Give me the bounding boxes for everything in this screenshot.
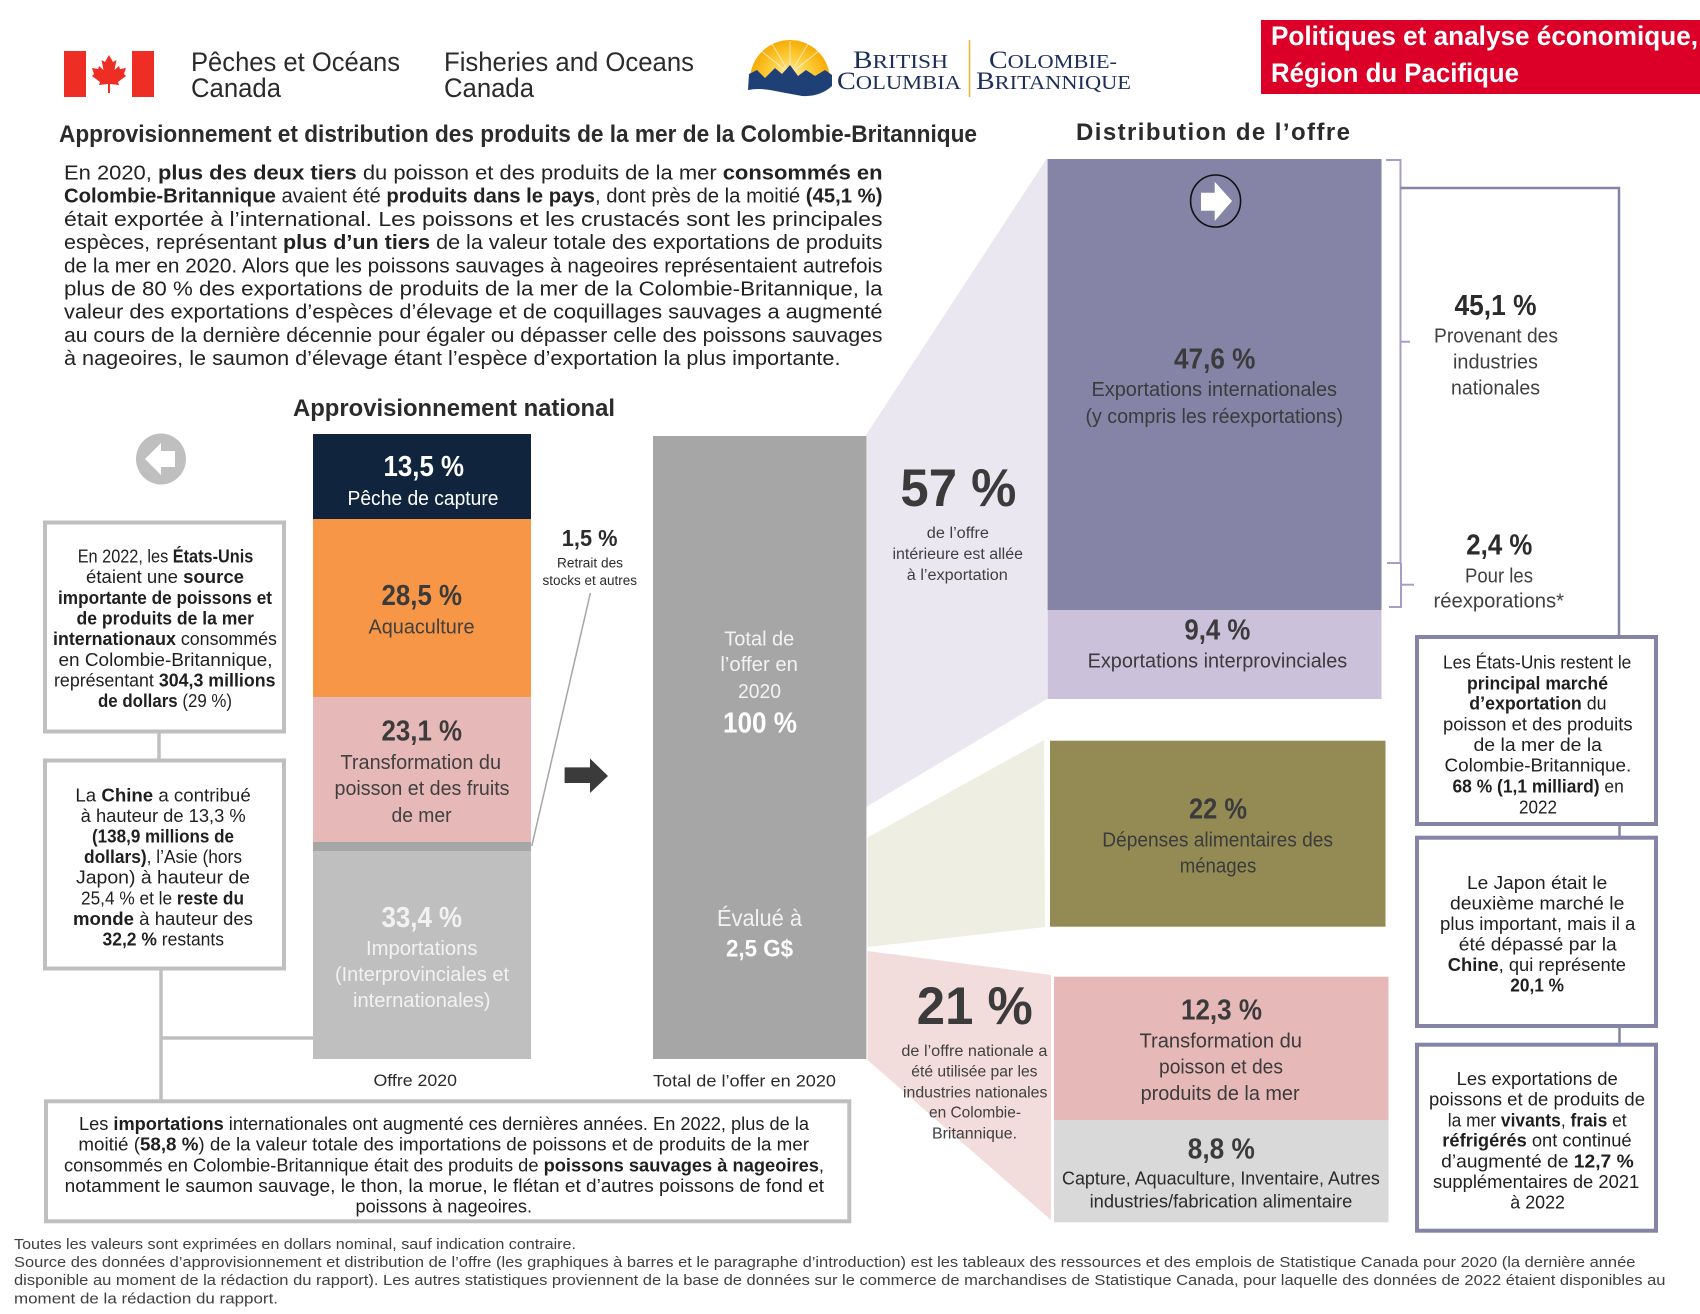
text block: introduction: de la mer en 2020. Alors que les poissons sauvages à nageoires représentaient autrefois [64, 255, 882, 277]
segment: international exports [1048, 159, 1382, 610]
panel: United States export market: de la mer de la [1474, 735, 1603, 755]
stat: 21 % used by industries: industries nationales [903, 1084, 1048, 1101]
panel: United States imports: en Colombie-Britannique, [58, 650, 272, 670]
segment: Transformation [313, 697, 531, 842]
segment: Transformation: de mer [392, 805, 452, 827]
segment: Transformation: 23,1 % [382, 716, 462, 748]
chart: Total de l'offre bar: l’offer en [720, 654, 798, 676]
text block: introduction: espèces, représentant plus d’un tiers de la valeur totale des exportations de produits [64, 232, 882, 254]
text block: footnotes: Toutes les valeurs sont exprimées en dollars nominal, sauf indication contraire. [14, 1236, 576, 1253]
panel: Japan export market [1417, 838, 1656, 1026]
chart: Offre 2020 stacked bar [313, 434, 531, 1090]
segment: interprovincial exports: Exportations interprovinciales [1088, 651, 1347, 673]
stat: 57 % exported: de l’offre [927, 525, 989, 542]
logo: British Columbia [748, 40, 1131, 97]
connector: right purple line [1400, 188, 1620, 1043]
axis label: Total de l'offre: Total de l’offer en 2020 [653, 1072, 836, 1090]
axis label: Offre 2020: Offre 2020 [374, 1071, 457, 1090]
banner: Politiques et analyse économique: Politiques et analyse économique, [1271, 21, 1698, 51]
wordmark: French [191, 47, 400, 103]
text block: introduction: plus de 80 % des exportations de produits de la mer de la Colombie-Britannique, la [64, 278, 883, 300]
segment: processing industries: poisson et des [1159, 1057, 1283, 1079]
panel: United States imports: importante de poissons et [58, 588, 272, 608]
callout: 1,5 % stock withdrawal: Retrait des [557, 555, 623, 570]
panel: United States export market: poisson et des produits [1443, 714, 1633, 734]
panel: China imports: à hauteur de 13,3 % [81, 806, 246, 826]
stat: 21 % used by industries: en Colombie- [929, 1105, 1021, 1122]
segment: other industries: Capture, Aquaculture, Inventaire, Autres [1062, 1168, 1380, 1188]
segment: interprovincial exports: 9,4 % [1184, 614, 1251, 646]
segment: other industries: industries/fabrication alimentaire [1090, 1192, 1352, 1212]
panel: Japan export market: Le Japon était le [1467, 873, 1607, 893]
panel: live, fresh and chilled exports: Les exportations de [1457, 1069, 1618, 1089]
wordmark: English: Fisheries and Oceans [444, 47, 694, 77]
panel: international imports: Les importations internationales ont augmenté ces dernières années. En 2022, plus de la [79, 1114, 810, 1134]
wordmark: English [444, 47, 694, 103]
segment: Transformation: poisson et des fruits [334, 778, 510, 800]
stat: 2,4 % re-exports: 2,4 % [1466, 529, 1532, 561]
panel: Japan export market: deuxième marché le [1450, 893, 1624, 913]
panel: live, fresh and chilled exports: d’augmenté de 12,7 % [1441, 1151, 1634, 1171]
text block: footnotes: moment de la rédaction du rapport. [14, 1290, 278, 1307]
heading: Approvisionnement national: Approvisionnement national [293, 395, 615, 422]
icon: BC sun and mountains [748, 40, 832, 96]
panel: United States imports: En 2022, les États-Unis [78, 546, 253, 566]
callout: 1,5 % stock withdrawal [532, 525, 637, 846]
wordmark: British Columbia: COLUMBIA [837, 68, 962, 95]
panel: international imports: notamment le saumon sauvage, le thon, la morue, le flétan et d’autres poissons de fond et [65, 1176, 824, 1196]
connector: left grey lines [159, 733, 313, 1100]
panel: live, fresh and chilled exports [1417, 1045, 1656, 1231]
funnel: household share [868, 740, 1045, 947]
funnel: industry share [868, 951, 1051, 1220]
chart: Total de l'offre bar: Évalué à [717, 905, 802, 931]
panel: live, fresh and chilled exports: à 2022 [1510, 1193, 1565, 1213]
text block: introduction: valeur des exportations d’espèces d’élevage et de coquillages sauvages a augmenté [64, 302, 882, 324]
panel: United States export market: Colombie-Britannique. [1444, 756, 1631, 776]
segment: Pêche de capture: 13,5 % [384, 451, 464, 483]
icon: left arrow [136, 434, 186, 484]
panel: live, fresh and chilled exports: réfrigérés ont continué [1442, 1131, 1632, 1151]
stat: 57 % exported: à l’exportation [907, 567, 1008, 584]
logo: Government of Canada [64, 47, 694, 103]
panel: live, fresh and chilled exports: supplémentaires de 2021 [1433, 1172, 1639, 1192]
segment: Importations: Importations [366, 938, 478, 960]
text block: introduction [64, 162, 883, 370]
panel: United States imports: représentant 304,3 millions [54, 670, 276, 690]
segment: processing industries: produits de la mer [1141, 1083, 1300, 1105]
stat: 21 % used by industries: Britannique. [932, 1125, 1017, 1142]
wordmark: Colombie-Britannique: BRITANNIQUE [976, 68, 1131, 95]
divider: gold [968, 40, 970, 97]
heading: Distribution de l'offre: Distribution de l’offre [1076, 119, 1350, 146]
panel: Japan export market: plus important, mais il a [1440, 914, 1636, 934]
stat: 45,1 % domestic: 45,1 % [1454, 290, 1537, 322]
text block: introduction: Colombie-Britannique avaient été produits dans le pays, dont près de la moitié (45,1 %) [64, 186, 882, 208]
segment: Pêche de capture: Pêche de capture [348, 488, 498, 510]
banner: Politiques et analyse économique: Région du Pacifique [1271, 58, 1519, 88]
stat: 2,4 % re-exports: réexporations* [1434, 591, 1564, 613]
segment: household food spending: ménages [1180, 856, 1256, 878]
icon: Canadian flag [64, 51, 154, 97]
wordmark: British Columbia [837, 47, 962, 95]
segment: international exports: 47,6 % [1174, 343, 1256, 375]
wordmark: Colombie-Britannique: COLOMBIE- [989, 47, 1117, 74]
panel: United States export market [1417, 637, 1656, 824]
arrow: supply to total [565, 758, 608, 793]
wordmark: English: Canada [444, 73, 535, 103]
panel: China imports: Japon) à hauteur de [76, 868, 250, 888]
stat: 45,1 % domestic: nationales [1451, 377, 1540, 399]
panel: United States export market: Les États-Unis restent le [1443, 652, 1631, 672]
text block: introduction: était exportée à l’international. Les poissons et les crustacés sont les principales [64, 209, 882, 231]
segment: interprovincial exports [1048, 610, 1382, 699]
wordmark: French: Canada [191, 73, 282, 103]
segment: processing industries: Transformation du [1140, 1031, 1302, 1053]
banner: Politiques et analyse économique [1261, 20, 1700, 94]
panel: China imports: dollars), l’Asie (hors [84, 847, 242, 867]
chart: Total de l'offre bar: 2,5 G$ [726, 936, 794, 963]
segment: household food spending: Dépenses alimentaires des [1102, 830, 1333, 852]
panel: live, fresh and chilled exports: poissons et de produits de [1429, 1090, 1645, 1110]
wordmark: Colombie-Britannique [976, 47, 1131, 95]
text block: footnotes: disponible au moment de la rédaction du rapport). Les autres statistiques proviennent de la base de données sur le commerce de marchandises de Statistique Canada, pour laquelle des données de 2022 étaient disponibles au [14, 1272, 1666, 1289]
panel: China imports [45, 760, 284, 968]
title: Approvisionnement et distribution des produits de la mer de la Colombie-Britannique [59, 121, 977, 148]
panel: United States imports: de dollars (29 %) [98, 691, 232, 711]
panel: international imports [46, 1101, 849, 1221]
segment: household food spending: 22 % [1189, 793, 1247, 825]
stat: 57 % exported: 57 % [900, 459, 1016, 518]
segment: processing industries: 12,3 % [1181, 994, 1262, 1026]
chart: Total de l'offre bar: 2020 [738, 681, 781, 703]
stat: 2,4 % re-exports: Pour les [1465, 565, 1533, 587]
funnel: exports share [866, 158, 1047, 807]
segment: international exports: (y compris les réexportations) [1086, 406, 1343, 428]
panel: Japan export market: 20,1 % [1510, 976, 1564, 996]
callout: 1,5 % stock withdrawal: stocks et autres [542, 573, 637, 588]
panel: United States imports: étaient une source [86, 567, 244, 587]
text block: introduction: au cours de la dernière décennie pour égaler ou dépasser celle des poissons sauvages [64, 325, 882, 347]
panel: live, fresh and chilled exports: la mer vivants, frais et [1448, 1110, 1627, 1130]
segment: Pêche de capture [313, 434, 531, 519]
stat: 57 % exported [892, 459, 1023, 584]
segment: Importations: (Interprovinciales et [335, 964, 509, 986]
panel: China imports: La Chine a contribué [75, 785, 251, 805]
brackets: export breakdown [1386, 160, 1414, 607]
segment: household food spending [1050, 741, 1386, 927]
panel: United States export market: principal marché [1467, 673, 1608, 693]
panel: United States export market: 68 % (1,1 milliard) en [1452, 776, 1624, 796]
segment: processing industries [1054, 977, 1388, 1120]
panel: international imports: poissons à nageoires. [356, 1197, 532, 1217]
segment: Transformation: Transformation du [340, 752, 501, 774]
segment: international exports: Exportations internationales [1092, 379, 1337, 401]
panel: United States imports [45, 522, 284, 732]
segment: Aquaculture: Aquaculture [368, 616, 474, 638]
panel: Japan export market: Chine, qui représente [1448, 955, 1626, 975]
segment: stock withdrawal [313, 842, 531, 851]
segment: Importations [313, 851, 531, 1059]
segment: Importations: internationales) [353, 990, 490, 1012]
wordmark: French: Pêches et Océans [191, 47, 400, 77]
wordmark: British Columbia: BRITISH [853, 47, 948, 74]
text block: footnotes: Source des données d’approvisionnement et distribution de l’offre (les graphiques à barres et le paragraphe d’introduction) est les tableaux des ressources et des emplois de Statistique Canada pour 2020 (la dernière année [14, 1254, 1635, 1271]
segment: Importations: 33,4 % [382, 902, 462, 934]
stat: 21 % used by industries: de l’offre nationale a [901, 1043, 1048, 1060]
stat: 21 % used by industries: été utilisée par les [911, 1064, 1038, 1081]
panel: international imports: moitié (58,8 %) de la valeur totale des importations de poissons et de produits de la mer [78, 1135, 809, 1155]
callout: 1,5 % stock withdrawal: 1,5 % [562, 525, 618, 551]
segment: other industries [1054, 1120, 1388, 1222]
segment: Aquaculture [313, 519, 531, 697]
panel: China imports: 25,4 % et le reste du [81, 888, 244, 908]
stat: 45,1 % domestic: industries [1453, 351, 1538, 373]
panel: China imports: 32,2 % restants [102, 930, 224, 950]
stat: 45,1 % domestic: Provenant des [1434, 326, 1558, 348]
panel: Japan export market: été dépassé par la [1459, 935, 1618, 955]
panel: United States imports: de produits de la mer [76, 608, 254, 628]
text block: introduction: En 2020, plus des deux tiers du poisson et des produits de la mer consommés en [64, 162, 882, 184]
stat: 21 % used by industries: 21 % [917, 977, 1033, 1036]
stat: 45,1 % domestic [1434, 290, 1558, 399]
segment: Aquaculture: 28,5 % [382, 580, 462, 612]
stat: 57 % exported: intérieure est allée [892, 546, 1023, 563]
panel: United States export market: d’exportation du [1469, 694, 1606, 714]
chart: Total de l'offre bar: 100 % [723, 708, 797, 740]
panel: United States export market: 2022 [1519, 797, 1557, 817]
panel: international imports: consommés en Colombie-Britannique était des produits de poissons sauvages à nageoires, [64, 1155, 824, 1175]
segment: other industries: 8,8 % [1188, 1133, 1255, 1165]
text block: footnotes [14, 1236, 1666, 1307]
panel: United States imports: internationaux consommés [53, 629, 277, 649]
panel: China imports: (138,9 millions de [92, 826, 234, 846]
text block: introduction: à nageoires, le saumon d’élevage étant l’espèce d’exportation la plus importante. [64, 348, 840, 370]
panel: China imports: monde à hauteur des [73, 909, 253, 929]
chart: Total de l'offre bar [653, 436, 866, 1090]
stat: 21 % used by industries [901, 977, 1048, 1142]
stat: 2,4 % re-exports [1434, 529, 1564, 613]
icon: right arrow [1191, 175, 1241, 227]
chart: Total de l'offre bar: Total de [724, 628, 794, 650]
